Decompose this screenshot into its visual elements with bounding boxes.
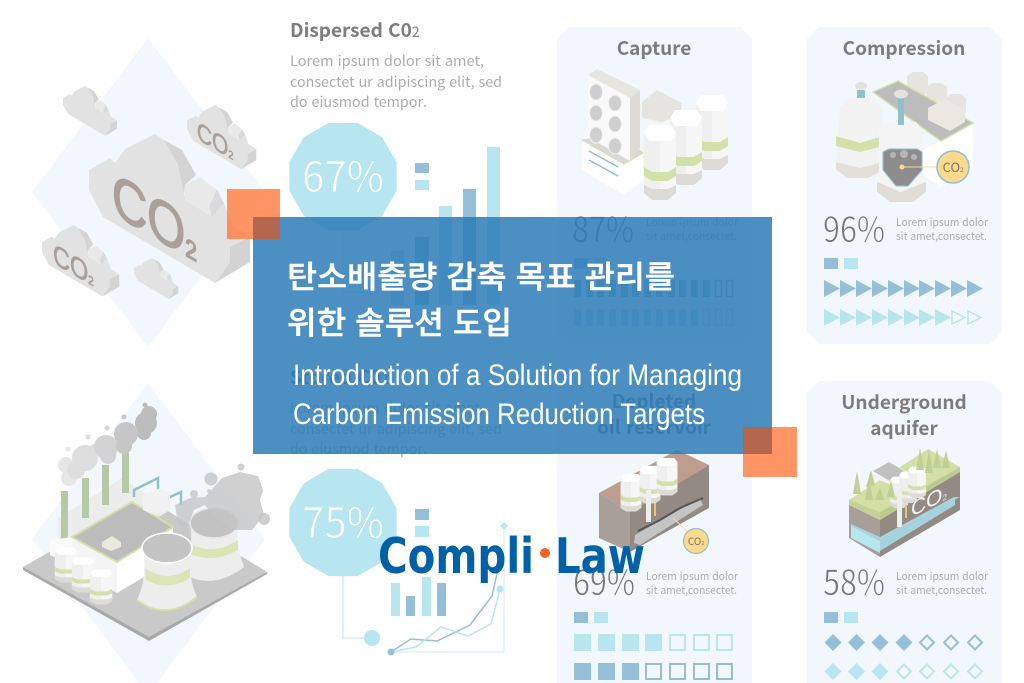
stat: 87%: 87% (572, 202, 634, 253)
panel: compression (807, 27, 1002, 344)
caption: depleted (646, 568, 739, 598)
cooling tower steam (175, 464, 270, 530)
caption: capture: sit amet,consectet. (646, 228, 737, 244)
heading: underground aquifer (841, 388, 967, 441)
pictogram rows: depleted (574, 634, 732, 680)
teal pipes (134, 478, 181, 512)
stat: 96%: 96% (823, 202, 885, 253)
orange accent square: top left (227, 189, 280, 239)
illustration: reservoir block (599, 450, 709, 554)
front cooling tower (137, 533, 197, 610)
heading: depleted oil reservoir: Depleted (612, 387, 696, 414)
bar and line chart: 75% (343, 509, 508, 656)
section heading: dispersed CO2: Dispersed C02 (290, 16, 420, 43)
large cloud (89, 134, 250, 283)
diamond background: factory (32, 383, 265, 683)
body text: dispersed CO2: consectet ur adipiscing elit, sed (290, 71, 502, 92)
body text: dispersed CO2 (290, 50, 502, 112)
caption: compression: sit amet,consectet. (896, 228, 987, 244)
stat badge: 75% (289, 469, 397, 576)
connector line to chart (343, 230, 372, 292)
small cloud top left (63, 86, 117, 136)
stat badge: 67% (289, 123, 397, 230)
cloud bottom left: CO2 (53, 237, 94, 293)
process tanks back (143, 488, 170, 515)
heading: depleted oil reservoir: oil reservoir (597, 413, 712, 440)
illustration: capture unit (582, 69, 728, 200)
green roof (72, 502, 173, 562)
small cloud bottom middle (134, 258, 178, 299)
illustration: aquifer block: CO2 (911, 480, 947, 522)
diamond background: CO2 clouds (32, 38, 265, 347)
illustration: compressor (836, 72, 973, 202)
chimney smoke (58, 402, 157, 486)
rooftop box (102, 536, 121, 551)
orange accent square: bottom right (743, 427, 797, 477)
korean title: 탄소배출량 감축 목표 관리를 (287, 260, 675, 295)
body text: hidden behind banner: consectet ur adipiscing elit, sed (290, 418, 502, 439)
rear cooling tower (185, 508, 244, 581)
pictogram rows: capture (574, 280, 732, 326)
pictogram rows: compression (824, 280, 983, 326)
caption: underground: sit amet,consectet. (896, 582, 987, 598)
body text: dispersed CO2: Lorem ipsum dolor sit amet, (290, 50, 484, 71)
illustration: CO2 clouds (42, 86, 256, 299)
cloud top right (187, 105, 256, 169)
english title: Carbon Emission Reduction Targets (293, 398, 705, 431)
heading: capture: Capture (617, 34, 691, 61)
badge: CO2: CO2 (943, 157, 964, 176)
korean title (287, 260, 675, 341)
caption: compression: Lorem ipsum dolor (896, 214, 989, 230)
bar chart: dispersed CO2 (391, 147, 500, 305)
english title: Introduction of a Solution for Managing (293, 359, 742, 392)
stat: 58%: 58% (823, 555, 885, 606)
panel: depleted oil reservoir (557, 381, 752, 683)
cloud top right: CO2 (197, 116, 234, 166)
body text: hidden behind banner: Lorem ipsum dolor sit amet, (290, 397, 484, 418)
caption: compression (896, 214, 989, 244)
caption: underground: Lorem ipsum dolor (896, 568, 989, 584)
illustration: factory (23, 402, 270, 641)
logo: Compli Law: Compli (378, 528, 534, 585)
legend: depleted (574, 612, 608, 623)
storage tanks (55, 547, 112, 604)
english title (293, 359, 742, 431)
cloud bottom left (42, 225, 119, 297)
base plate (23, 497, 267, 640)
panel: underground aquifer (807, 381, 1002, 683)
legend: underground (824, 612, 858, 623)
back walls (58, 478, 170, 560)
logo: Compli Law: Law (555, 528, 645, 585)
panel: capture (557, 27, 752, 345)
building (72, 537, 117, 593)
legend: capture (574, 258, 608, 269)
korean title: 위한 솔루션 도입 (287, 306, 512, 341)
stat badge: 75%: 75% (302, 490, 384, 551)
badge: CO2: CO2 (688, 533, 704, 548)
caption: capture (646, 214, 739, 244)
body text: dispersed CO2: do eiusmod tempor. (290, 91, 427, 112)
section heading: hidden behind banner: Stored C02 (290, 363, 389, 390)
heading: underground aquifer: aquifer (870, 414, 938, 441)
heading: compression: Compression (843, 34, 965, 61)
stat: 69%: 69% (573, 555, 635, 606)
pictogram rows: underground (824, 634, 982, 680)
body text: hidden behind banner (290, 397, 502, 459)
caption: depleted: Lorem ipsum dolor (646, 568, 739, 584)
caption: depleted: sit amet,consectet. (646, 582, 737, 598)
large cloud: CO2 (112, 158, 197, 275)
illustration: aquifer block (849, 448, 960, 557)
heading: underground aquifer: Underground (841, 388, 967, 415)
heading: depleted oil reservoir (597, 387, 712, 440)
body text: hidden behind banner: do eiusmod tempor. (290, 438, 427, 459)
stat badge: 67%: 67% (302, 144, 384, 205)
title banner (253, 217, 772, 454)
legend: compression (824, 258, 858, 269)
chimneys (61, 453, 129, 543)
caption: capture: Lorem ipsum dolor (646, 214, 739, 230)
caption: underground (896, 568, 989, 598)
